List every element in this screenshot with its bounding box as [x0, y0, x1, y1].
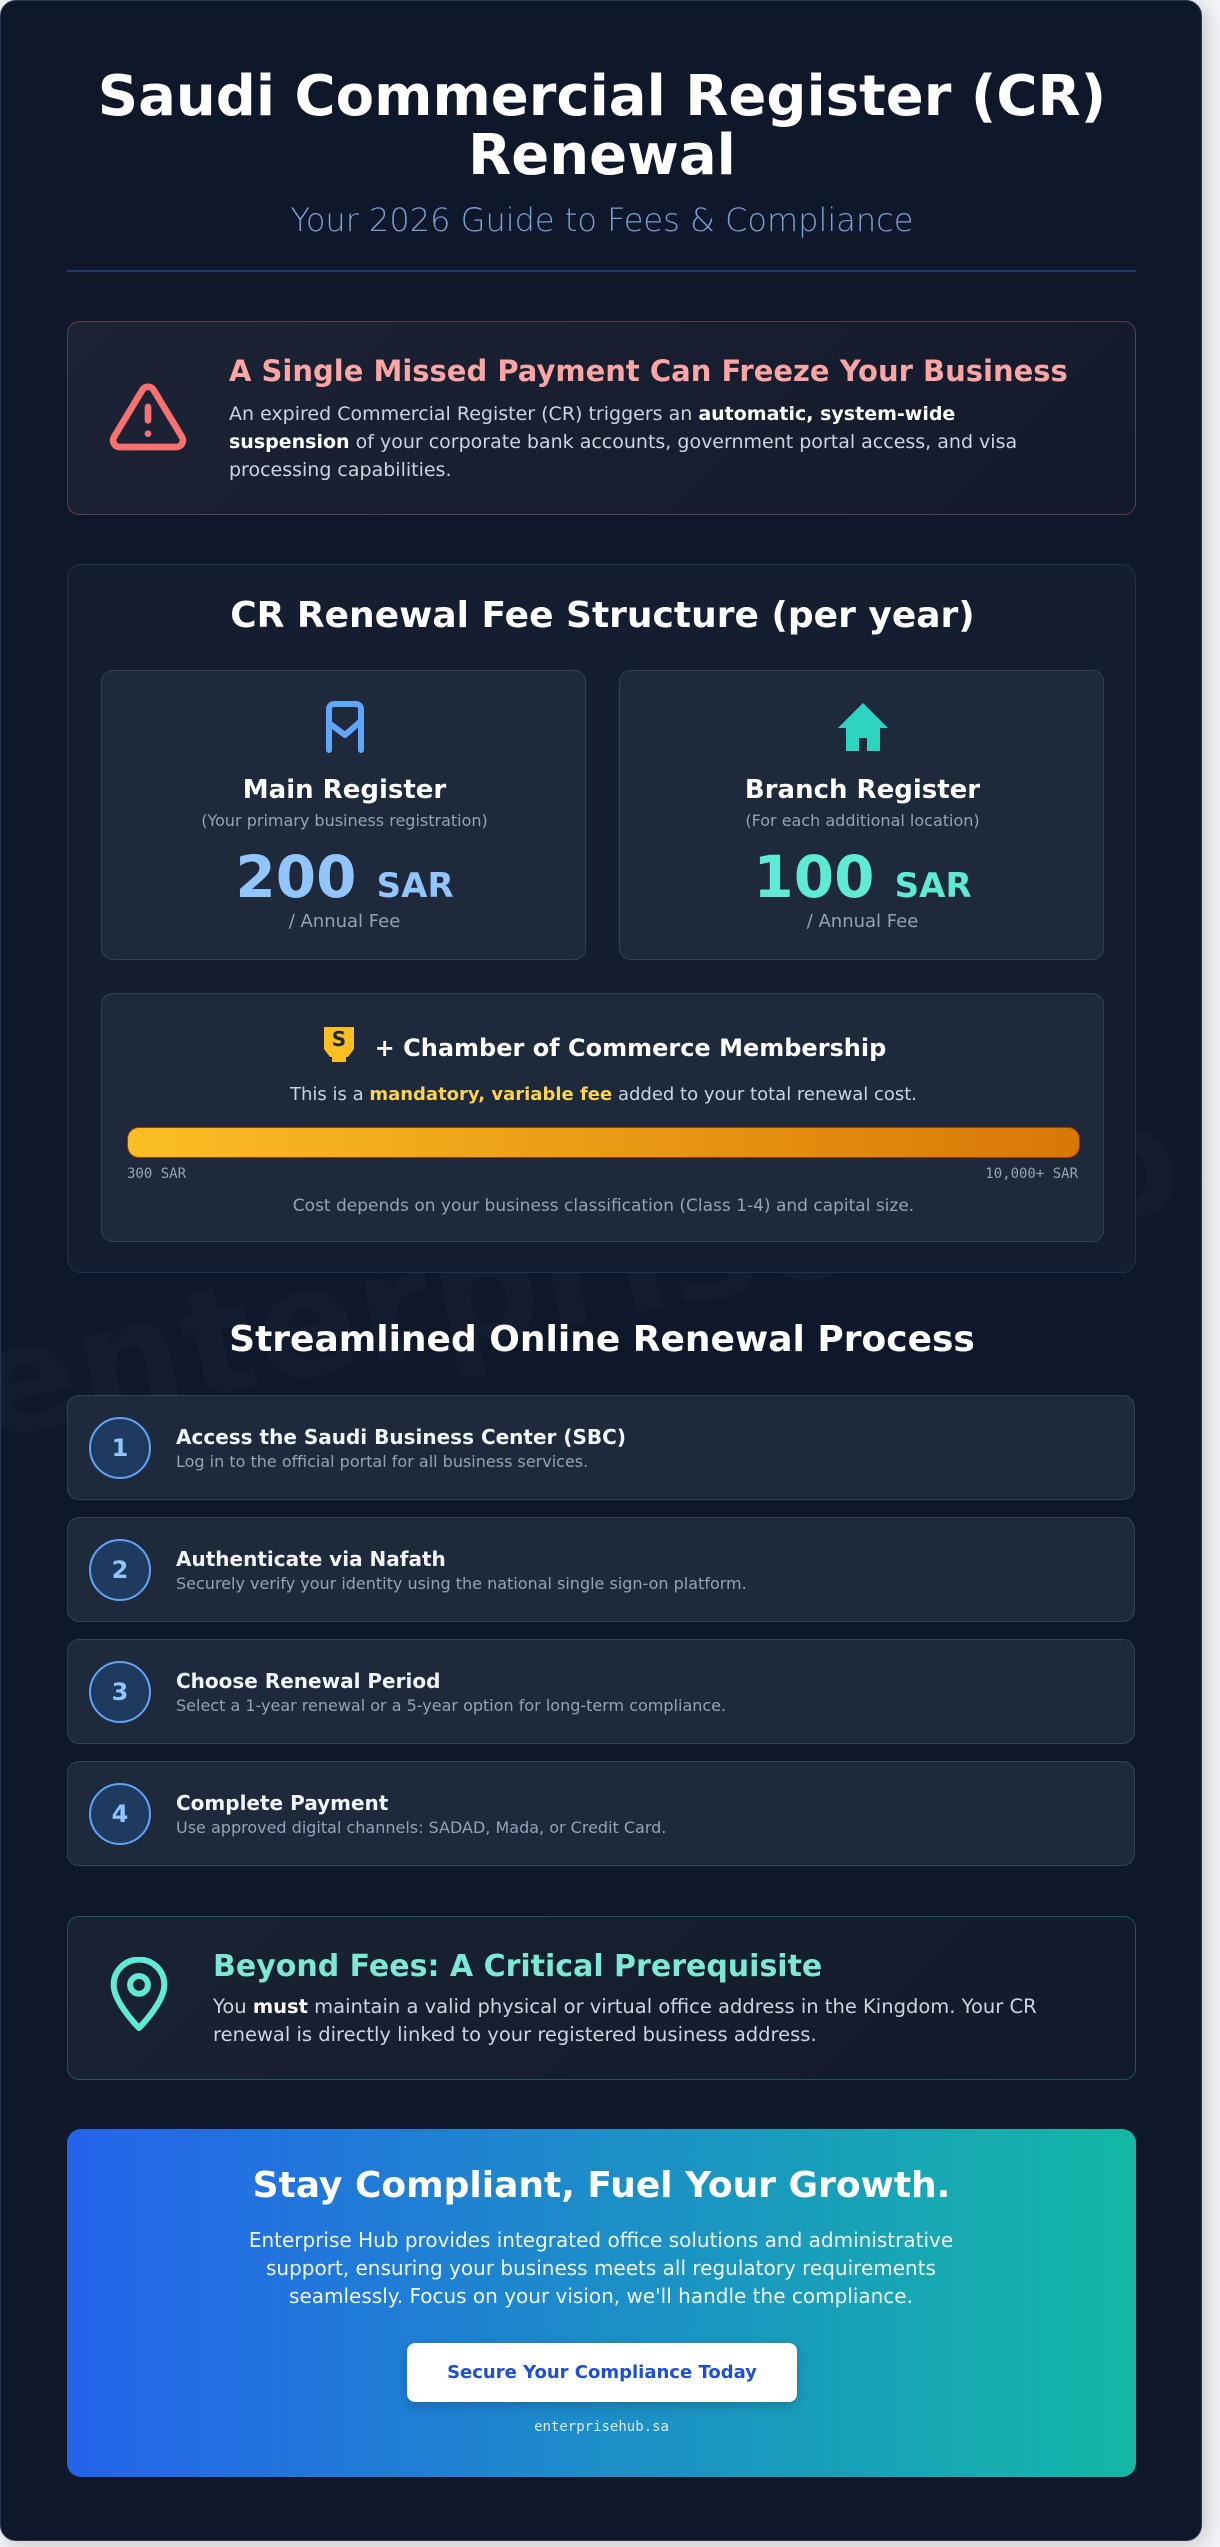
warning heading: A Single Missed Payment Can Freeze Your Business: [229, 354, 1068, 388]
step 1: Access the Saudi Business Center (SBC): [176, 1425, 626, 1449]
step 1: Log in to the official portal for all business services.: [176, 1452, 588, 1471]
icon: house: [838, 703, 888, 751]
cta button: [407, 2343, 797, 2402]
panel: warning: [67, 321, 1136, 515]
cta button: Secure Your Compliance Today: [447, 2362, 757, 2383]
cta heading: Stay Compliant, Fuel Your Growth.: [253, 2165, 950, 2206]
card: chamber of commerce: 300 SAR: [127, 1166, 186, 1182]
title: [98, 64, 1106, 188]
step 3: Select a 1-year renewal or a 5-year option for long-term compliance.: [176, 1696, 726, 1715]
step 2: Authenticate via Nafath: [176, 1547, 446, 1571]
step 4: Complete Payment: [176, 1791, 388, 1815]
bar chart: fee range: [127, 1127, 1080, 1158]
card: branch register: (For each additional location): [745, 811, 980, 830]
chamber heading with icon: + Chamber of Commerce Membership: [375, 1034, 886, 1062]
card: main register: (Your primary business registration): [201, 811, 488, 830]
panel: prerequisite: [67, 1916, 1136, 2080]
url: enterprisehub.sa: [534, 2419, 669, 2435]
card: branch register: [619, 670, 1104, 960]
step 3: Choose Renewal Period: [176, 1669, 440, 1693]
step 1: 1: [112, 1434, 128, 1462]
step 2: Securely verify your identity using the national single sign-on platform.: [176, 1574, 747, 1593]
fee heading: CR Renewal Fee Structure (per year): [230, 595, 975, 636]
price: 100 SAR: [753, 843, 972, 911]
step 2: 2: [112, 1556, 128, 1584]
chamber heading with icon: S: [331, 1027, 346, 1051]
card: main register: / Annual Fee: [289, 911, 400, 932]
step 3: [67, 1639, 1135, 1744]
icon: main register: [326, 701, 364, 753]
card: chamber of commerce: 10,000+ SAR: [985, 1166, 1078, 1182]
title: Renewal: [468, 123, 736, 188]
card: branch register: / Annual Fee: [807, 911, 918, 932]
warning text: An expired Commercial Register (CR) triggers an automatic, system-wide suspension of your corporate bank accounts, government portal access, and visa processing capabilities.: [229, 403, 1017, 481]
step 2: [67, 1517, 1135, 1622]
prerequisite heading: Beyond Fees: A Critical Prerequisite: [213, 1949, 822, 1984]
step 3: 3: [112, 1678, 128, 1706]
panel: call to action: [67, 2129, 1136, 2477]
card: chamber of commerce: Cost depends on your business classification (Class 1-4) and capital size.: [293, 1196, 914, 1216]
prerequisite text: You must maintain a valid physical or virtual office address in the Kingdom. Your CR renewal is directly linked to your registered business address.: [213, 1995, 1037, 2046]
card: chamber of commerce: [101, 993, 1104, 1242]
card: main register: [101, 670, 586, 960]
panel: fee structure: [67, 564, 1136, 1273]
step 4: Use approved digital channels: SADAD, Mada, or Credit Card.: [176, 1818, 666, 1837]
price: 200 SAR: [235, 843, 454, 911]
chamber text: This is a mandatory, variable fee added to your total renewal cost.: [290, 1084, 917, 1105]
title: Saudi Commercial Register (CR): [98, 64, 1106, 129]
label: Main Register: [243, 775, 446, 805]
step 1: [67, 1395, 1135, 1500]
icon: warning triangle: [110, 384, 186, 450]
step 4: 4: [112, 1800, 128, 1828]
process heading: Streamlined Online Renewal Process: [229, 1319, 975, 1360]
subtitle: Your 2026 Guide to Fees & Compliance: [291, 201, 913, 239]
icon: location pin: [110, 1957, 168, 2031]
card: branch register: Branch Register: [745, 775, 980, 805]
cta text: Enterprise Hub provides integrated office solutions and administrative support, ensuring your business meets all regulatory requirements seamlessly. Focus on your vision, we'll handle the compliance.: [249, 2228, 953, 2308]
step 4: [67, 1761, 1135, 1866]
